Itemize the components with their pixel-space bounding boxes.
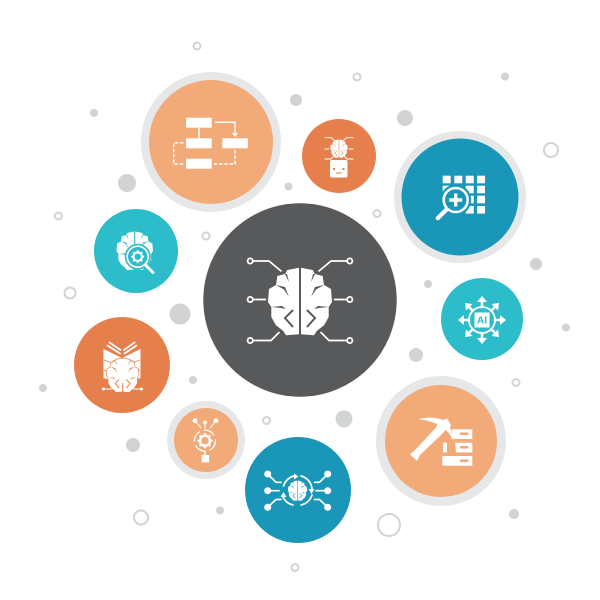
bubble: flowchart xyxy=(141,72,281,212)
bubble: pickaxe and servers xyxy=(376,376,506,506)
icon: brain with cycle arrows and nodes xyxy=(264,470,331,511)
chip label: AI xyxy=(477,316,487,327)
icon: flowchart xyxy=(174,118,248,169)
bubble: open book brain xyxy=(74,317,170,413)
icon: pickaxe mining data xyxy=(410,418,472,466)
bubble: brain network cycle xyxy=(245,437,351,543)
bubble: AI chip xyxy=(441,278,523,360)
icon: open book with brain xyxy=(102,342,143,392)
icon: gear with nodes xyxy=(193,418,218,462)
icon: central brain with circuits xyxy=(248,258,352,343)
background dots xyxy=(39,72,570,519)
icon: grid with magnifier xyxy=(438,176,485,218)
bubble: robot brain xyxy=(302,119,376,193)
icon: robot with brain xyxy=(325,138,353,178)
background rings xyxy=(55,42,558,571)
bubble: gear nodes xyxy=(167,401,245,479)
bubble: data grid magnifier xyxy=(394,131,526,263)
bubble: brain magnifier gear xyxy=(94,209,178,293)
icon: brain under magnifier xyxy=(116,232,153,272)
bubble: central brain xyxy=(203,203,397,397)
